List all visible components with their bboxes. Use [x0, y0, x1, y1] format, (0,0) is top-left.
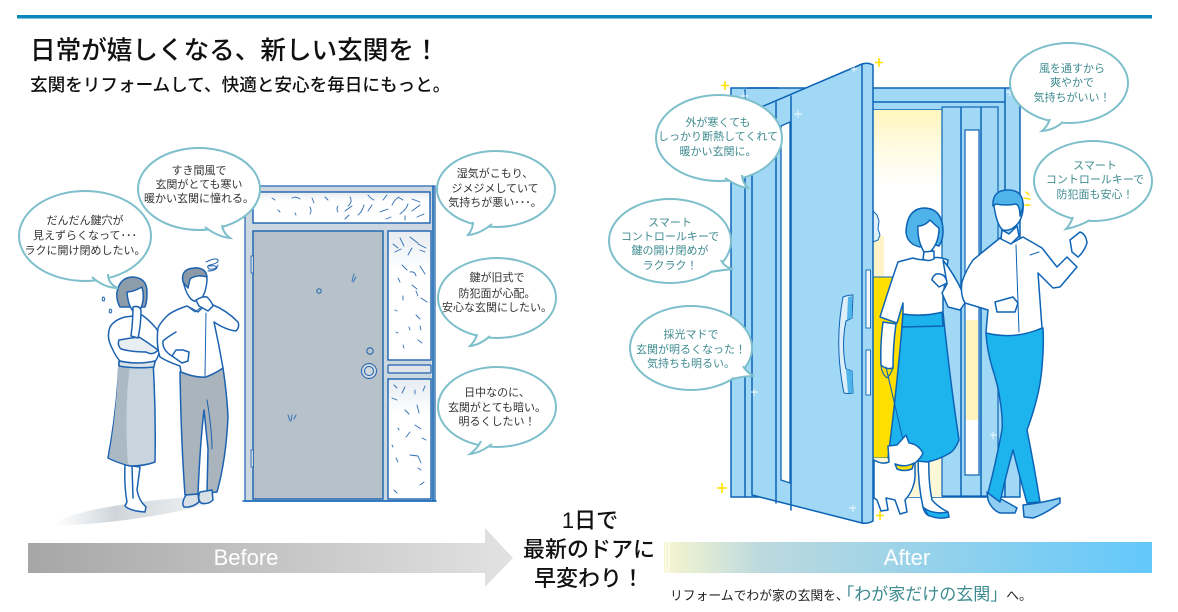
- center message: 最新のドアに: [523, 537, 655, 562]
- bubble: smart key easy: コントロールキーで: [621, 231, 719, 243]
- bubble: dark entrance: 日中なのに、: [464, 386, 530, 399]
- old door mail slot: [388, 365, 431, 373]
- bubble: old lock: [438, 258, 556, 346]
- after banner: After: [884, 545, 930, 570]
- door leaf: [752, 63, 873, 523]
- bubble: keyhole: 見えずらくなって･･･: [33, 229, 137, 242]
- old door side window bottom: [388, 379, 431, 499]
- bubble: keyhole: ラクに開け閉めしたい。: [24, 244, 146, 257]
- side panel: [942, 107, 998, 497]
- bubble: smart key easy: 鍵の開け閉めが: [632, 243, 708, 257]
- bubble: humidity: ジメジメしていて: [451, 182, 539, 195]
- title: 日常が嬉しくなる、新しい玄関を！: [30, 36, 440, 65]
- door frame: [731, 88, 1020, 497]
- ground shadow: [55, 497, 205, 526]
- sparkles: [717, 58, 1014, 520]
- bubble: draft: [138, 148, 260, 238]
- bubble: old lock: 防犯面が心配。: [458, 286, 536, 300]
- plant: [873, 211, 880, 242]
- bubble: draft: 玄関がとても寒い: [155, 177, 243, 191]
- illustration: happy man: [961, 190, 1087, 518]
- old door side window top: [388, 231, 431, 360]
- icon: confused swirl: [206, 259, 218, 271]
- bubble: smart key easy: ラクラク！: [642, 259, 698, 272]
- bubble: old lock: 鍵が旧式で: [470, 270, 524, 284]
- bubble: daylight window: 気持ちも明るい。: [647, 356, 735, 370]
- bubble: humidity: [437, 151, 555, 235]
- old door slab: [251, 231, 383, 499]
- top rule: [17, 15, 1152, 18]
- bubble: daylight window: 採光マドで: [664, 327, 718, 341]
- bubble: daylight window: [630, 306, 754, 390]
- bubble: smart key easy: [609, 199, 733, 283]
- icon: shine lines: [1024, 192, 1030, 205]
- bubble: dark entrance: 明るくしたい！: [458, 415, 536, 428]
- bubble: insulation: 外が寒くても: [685, 115, 751, 129]
- bubble: smart key security: 防犯面も安心！: [1056, 187, 1134, 201]
- center message: 1日で: [562, 508, 618, 533]
- door handle: [839, 295, 853, 394]
- bubble: ventilation: 気持ちがいい！: [1034, 90, 1110, 104]
- bubble: draft: すき間風で: [172, 164, 226, 177]
- bubble: smart key security: スマート: [1073, 160, 1117, 172]
- wall vase: [873, 236, 884, 277]
- bubble: ventilation: [1010, 43, 1128, 131]
- center message: [523, 508, 655, 591]
- illustration: worried woman: [102, 277, 160, 512]
- bubble: old lock: 安心な玄関にしたい。: [442, 301, 552, 314]
- bubble: daylight window: 玄関が明るくなった！: [636, 342, 746, 356]
- center message: 早変わり！: [534, 566, 644, 591]
- bubble: keyhole: [19, 191, 151, 288]
- illustration: happy woman with dog: [874, 208, 965, 518]
- yellow cabinet: [873, 277, 942, 497]
- bubble: insulation: 暖かい玄関に。: [680, 145, 756, 158]
- dog: [874, 435, 923, 514]
- illustration: old door: [243, 186, 436, 501]
- bubble: smart key security: [1034, 141, 1152, 229]
- bubble: smart key security: コントロールキーで: [1046, 174, 1144, 186]
- illustration: open new door: [717, 58, 1020, 523]
- subtitle: 玄関をリフォームして、快適と安心を毎日にもっと。: [30, 75, 450, 95]
- bubble: dark entrance: 玄関がとても暗い。: [448, 400, 546, 414]
- bubble: keyhole: だんだん鍵穴が: [46, 213, 124, 227]
- bubble: ventilation: 爽やかで: [1050, 76, 1094, 89]
- bubble: draft: 暖かい玄関に憧れる。: [144, 192, 254, 205]
- bubble: insulation: しっかり断熱してくれて: [658, 130, 778, 143]
- bubble: insulation: [656, 95, 782, 188]
- bubble: humidity: 気持ちが悪い･･･。: [448, 195, 542, 209]
- bubble: smart key easy: スマート: [648, 217, 692, 229]
- bubble: humidity: 湿気がこもり、: [457, 166, 533, 180]
- before arrow: Before: [214, 545, 278, 570]
- caption: リフォームでわが家の玄関を、「わが家だけの玄関」へ。: [670, 585, 1032, 604]
- bubble: dark entrance: [438, 367, 556, 454]
- illustration: worried man: [157, 259, 239, 507]
- lock plates: [866, 270, 870, 395]
- before arrow: [28, 528, 513, 587]
- old door transom window: [253, 192, 430, 223]
- bubble: ventilation: 風を通すから: [1039, 62, 1105, 75]
- interior light: [873, 110, 942, 497]
- after banner: [664, 542, 1152, 573]
